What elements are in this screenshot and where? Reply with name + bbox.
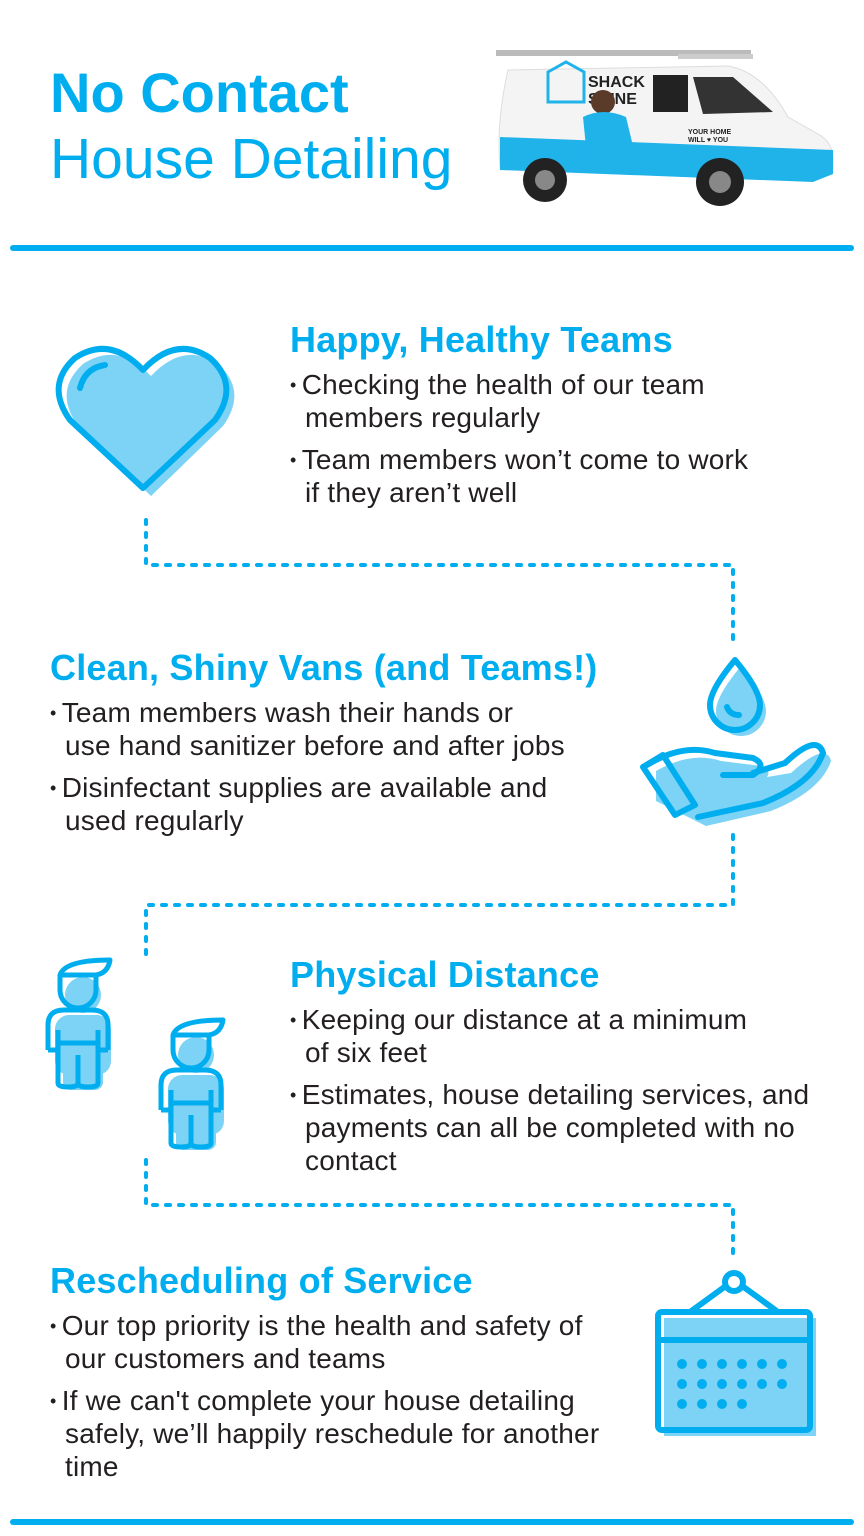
section 3: physical distance: contact: [305, 1145, 397, 1176]
van illustration: WILL ♥ YOU: [688, 137, 728, 144]
bottom divider: [10, 1519, 854, 1525]
section 4: rescheduling: time: [65, 1451, 119, 1482]
section 2: clean shiny vans: Clean, Shiny Vans (and Teams!): [50, 647, 597, 688]
icon: calendar: [655, 1270, 816, 1436]
van illustration: [496, 50, 834, 206]
section 4: rescheduling: Rescheduling of Service: [50, 1260, 473, 1301]
section 1: happy healthy teams: Team members won’t come to work: [302, 444, 748, 475]
section 3: physical distance: of six feet: [305, 1037, 427, 1068]
icon: heart: [56, 346, 234, 496]
top divider: [10, 245, 854, 251]
section 4: rescheduling: safely, we’ll happily reschedule for another: [65, 1418, 599, 1449]
section 1: happy healthy teams: members regularly: [305, 402, 540, 433]
title: House Detailing: [50, 127, 452, 191]
title: [50, 61, 452, 191]
title: No Contact: [50, 61, 349, 124]
section 3: physical distance: Physical Distance: [290, 954, 600, 995]
section 1: happy healthy teams: [290, 319, 748, 508]
section 3: physical distance: [290, 954, 809, 1176]
section 4: rescheduling: [50, 1260, 599, 1482]
section 2: clean shiny vans: Team members wash their hands or: [62, 697, 513, 728]
section 1: happy healthy teams: if they aren’t well: [305, 477, 517, 508]
section 2: clean shiny vans: [50, 647, 597, 836]
section 3: physical distance: payments can all be completed with no: [305, 1112, 795, 1143]
van illustration: YOUR HOME: [688, 129, 732, 136]
section 4: rescheduling: If we can't complete your house detailing: [62, 1385, 575, 1416]
section 1: happy healthy teams: Happy, Healthy Teams: [290, 319, 673, 360]
section 1: happy healthy teams: Checking the health of our team: [302, 369, 705, 400]
section 3: physical distance: Estimates, house detailing services, and: [302, 1079, 809, 1110]
van illustration: SHINE: [588, 91, 637, 108]
section 2: clean shiny vans: use hand sanitizer before and after jobs: [65, 730, 565, 761]
icon: two people: [46, 958, 226, 1150]
section 3: physical distance: Keeping our distance at a minimum: [302, 1004, 747, 1035]
section 2: clean shiny vans: Disinfectant supplies are available and: [62, 772, 547, 803]
section 4: rescheduling: our customers and teams: [65, 1343, 386, 1374]
icon: hand with water drop: [640, 657, 831, 826]
van illustration: SHACK: [588, 74, 645, 91]
section 4: rescheduling: Our top priority is the health and safety of: [62, 1310, 583, 1341]
section 2: clean shiny vans: used regularly: [65, 805, 244, 836]
